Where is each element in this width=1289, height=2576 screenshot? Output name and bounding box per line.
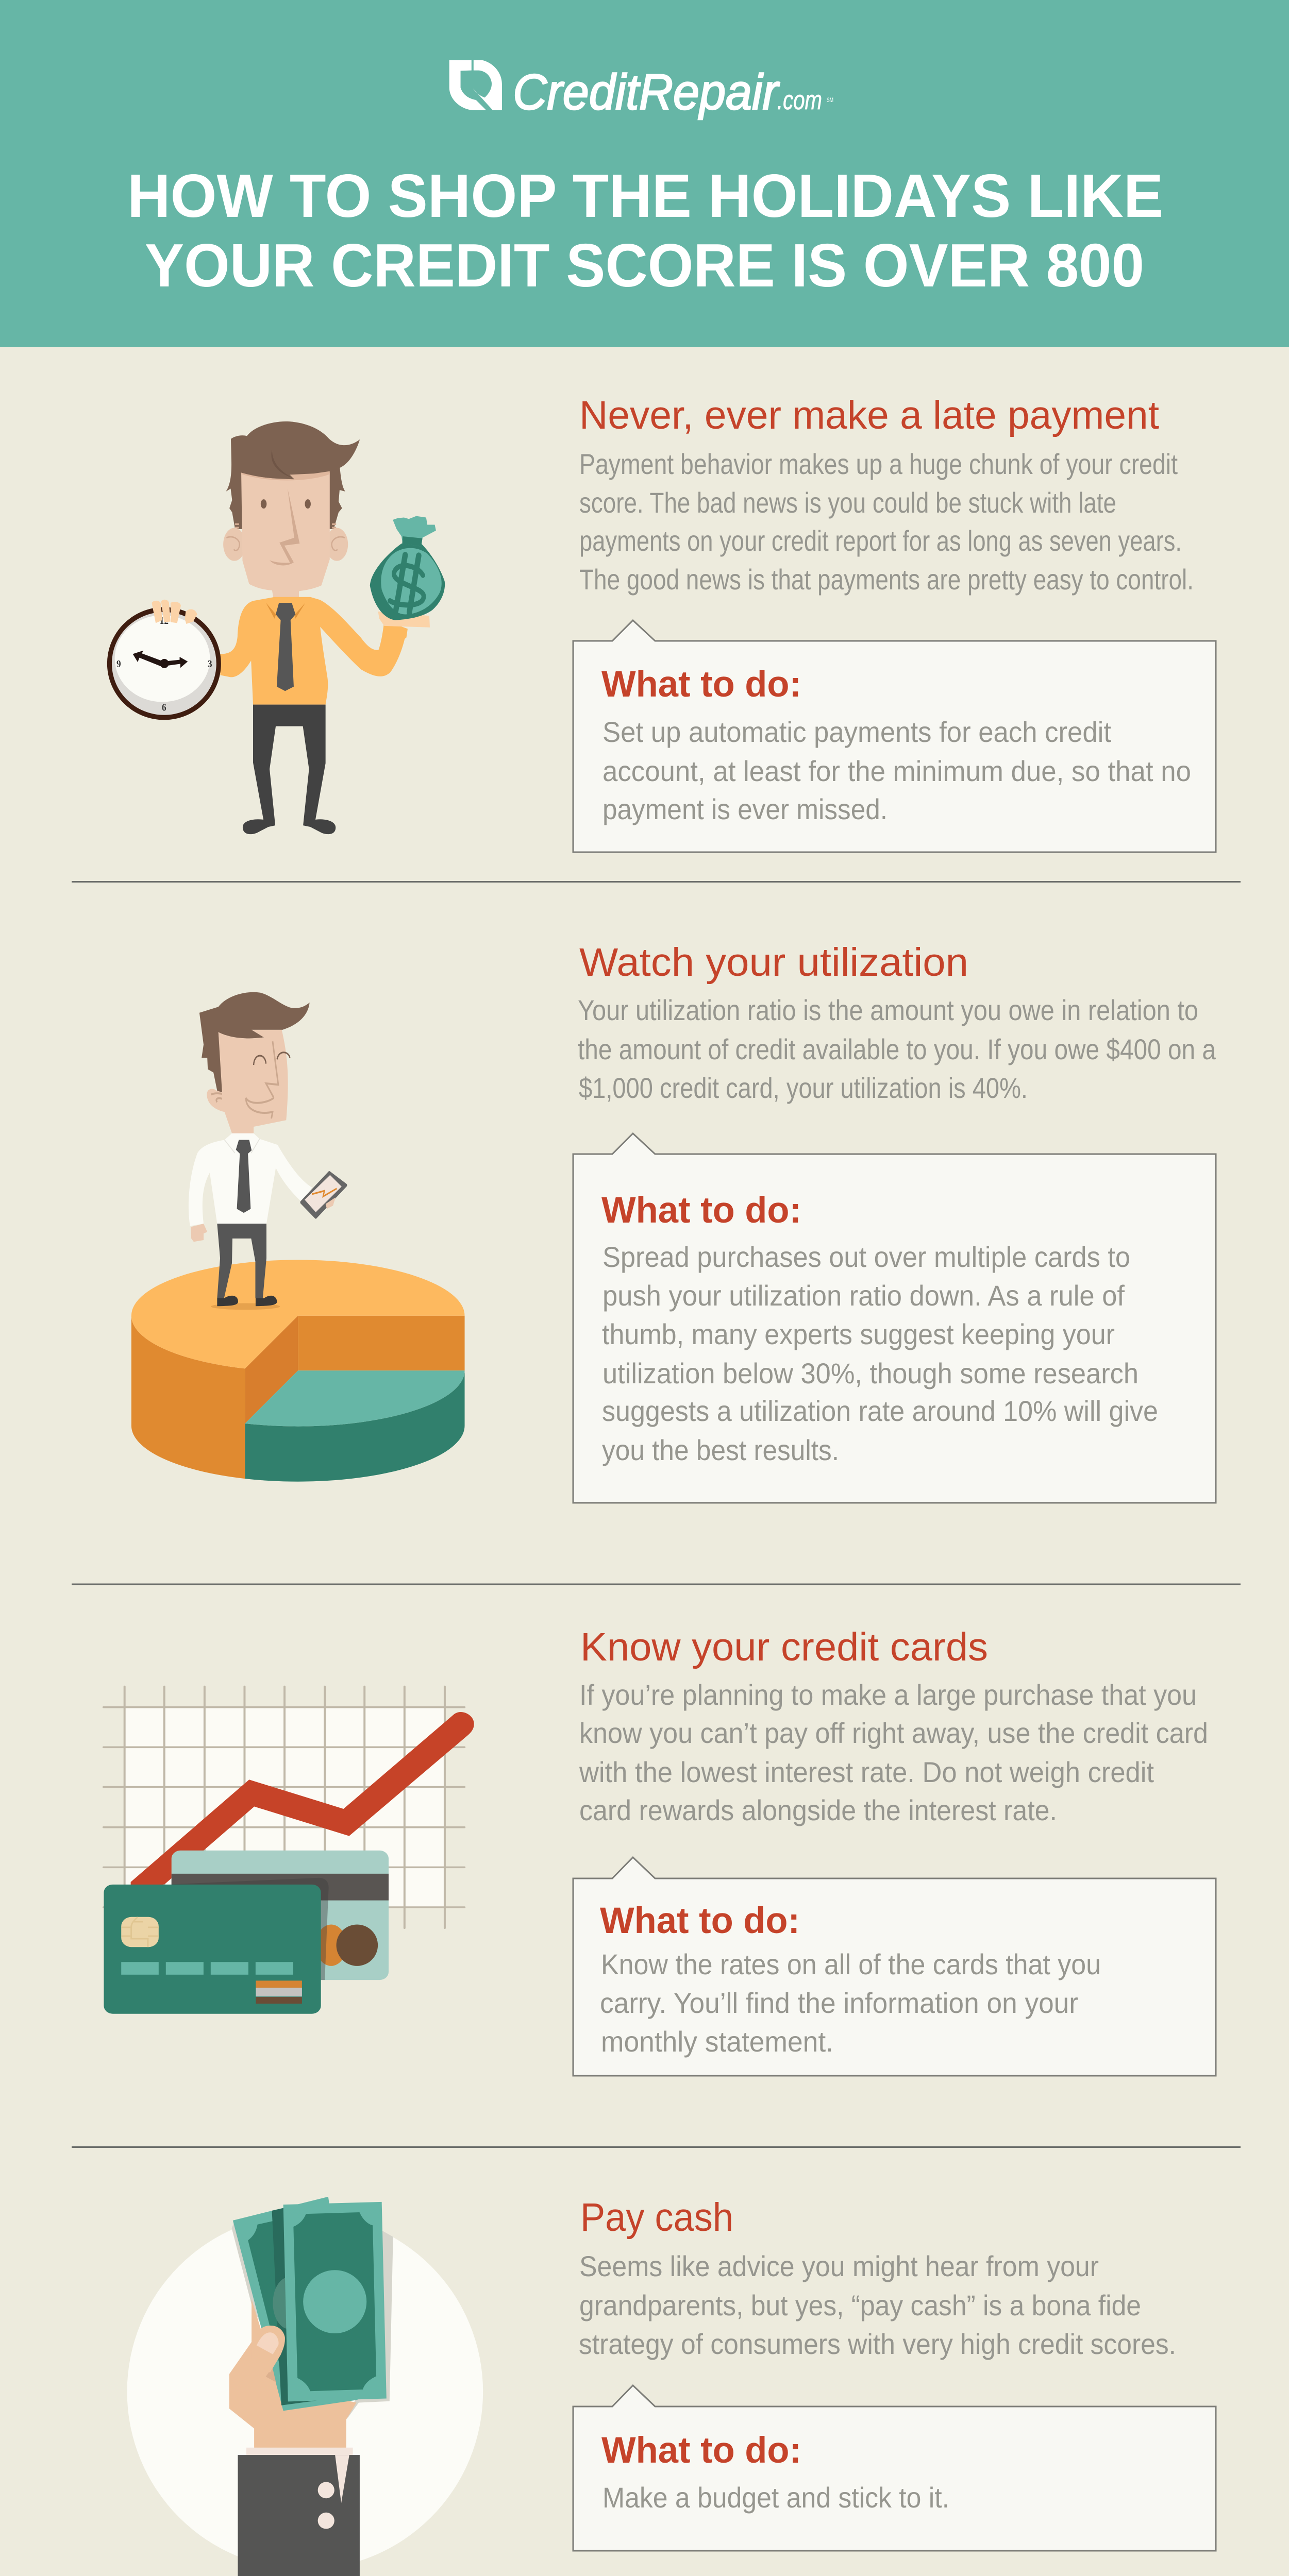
man: ear folds xyxy=(226,537,345,551)
body text: If you’re planning to make a large purchase that you xyxy=(579,1679,1197,1711)
callout: what to do xyxy=(573,1857,1216,2076)
callout: what to do xyxy=(573,620,1216,852)
callout: what to do xyxy=(573,2385,1216,2551)
heading: Never, ever make a late payment xyxy=(579,393,1159,437)
logo wordmark: CreditRepair xyxy=(513,64,780,120)
illustration: rising chart and credit cards xyxy=(104,1686,474,2014)
callout text: push your utilization ratio down. As a rule of xyxy=(602,1279,1125,1312)
illustration: man holding clock and money bag xyxy=(107,421,445,834)
icon: middle bill xyxy=(272,2207,322,2405)
body text: strategy of consumers with very high credit scores. xyxy=(579,2328,1176,2360)
body text xyxy=(578,994,1216,1104)
shirt cuff xyxy=(246,2448,353,2455)
callout heading: What to do: xyxy=(600,1901,800,1941)
illustration: man standing on pie chart xyxy=(131,992,465,1482)
body text: Seems like advice you might hear from your xyxy=(579,2250,1099,2282)
body text: with the lowest interest rate. Do not weigh credit xyxy=(579,1756,1154,1788)
title: YOUR CREDIT SCORE IS OVER 800 xyxy=(145,231,1144,300)
heading: Know your credit cards xyxy=(580,1625,988,1669)
title xyxy=(127,162,1163,300)
callout text: suggests a utilization rate around 10% will give xyxy=(602,1395,1158,1427)
logo service mark: SM xyxy=(827,96,833,104)
hand xyxy=(229,2299,356,2448)
body text xyxy=(579,448,1194,596)
callout text: monthly statement. xyxy=(601,2025,833,2058)
callout text xyxy=(600,1948,1101,2058)
heading: Pay cash xyxy=(580,2195,733,2240)
callout text xyxy=(602,716,1191,825)
icon: clock: 3 xyxy=(208,658,212,670)
body text xyxy=(579,1679,1208,1826)
panel: never make a late payment xyxy=(107,393,1216,852)
icon: clock: 6 xyxy=(162,702,166,714)
man: eyes xyxy=(261,499,311,509)
callout text: thumb, many experts suggest keeping your xyxy=(602,1318,1115,1350)
man: eyes xyxy=(254,1053,290,1065)
man: hairline shadow and curl xyxy=(241,471,330,480)
panel: pay cash xyxy=(127,2195,1216,2576)
callout text: Spread purchases out over multiple cards to xyxy=(602,1241,1130,1273)
background circle xyxy=(127,2214,483,2569)
panel: know your credit cards xyxy=(104,1625,1216,2076)
body text: Your utilization ratio is the amount you owe in relation to xyxy=(578,994,1198,1026)
man: tie xyxy=(276,603,295,691)
card badge xyxy=(256,1980,302,2004)
body text: know you can’t pay off right away, use the credit card xyxy=(579,1717,1208,1749)
icon: front credit card xyxy=(104,1885,321,2014)
icon: clock xyxy=(107,600,221,720)
card chip xyxy=(121,1917,159,1947)
chart line xyxy=(131,1712,474,1890)
callout text: Set up automatic payments for each credit xyxy=(602,716,1111,748)
icon: front bill xyxy=(283,2202,387,2401)
icon: phone xyxy=(302,1173,346,1217)
body text: Payment behavior makes up a huge chunk of your credit xyxy=(579,448,1178,480)
callout text: account, at least for the minimum due, so that no xyxy=(602,755,1191,787)
man: sideburn stripes xyxy=(235,523,336,529)
callout text: utilization below 30%, though some research xyxy=(602,1357,1139,1389)
body text: grandparents, but yes, “pay cash” is a bona fide xyxy=(579,2289,1141,2321)
callout text: you the best results. xyxy=(602,1434,839,1466)
man: shoes xyxy=(217,1296,277,1306)
man: face xyxy=(241,472,330,604)
man: ears xyxy=(223,528,348,561)
callout text: Make a budget and stick to it. xyxy=(602,2481,949,2514)
man: hair xyxy=(226,421,360,529)
header banner xyxy=(0,0,1289,347)
callout text: Know the rates on all of the cards that you xyxy=(601,1948,1101,1980)
illustration: hand holding cash xyxy=(127,2197,483,2576)
card number xyxy=(121,1962,293,1975)
man: left hand xyxy=(191,1224,207,1242)
callout heading: What to do: xyxy=(601,664,801,705)
man: trousers and shoes xyxy=(243,705,336,834)
icon: money bag xyxy=(370,516,445,628)
callout text xyxy=(602,1241,1158,1466)
pie chart xyxy=(131,1260,465,1482)
icon: logo mark xyxy=(449,60,502,110)
man: collar shading xyxy=(225,1139,260,1153)
chart grid xyxy=(104,1686,464,1928)
man: nose and smile xyxy=(270,488,299,565)
callout text: payment is ever missed. xyxy=(602,793,888,825)
man: collar xyxy=(266,603,305,619)
callout heading: What to do: xyxy=(601,2430,801,2471)
man: nose and smile xyxy=(211,1041,278,1118)
icon: clock: 12 xyxy=(160,615,169,626)
logo: CreditRepair.com xyxy=(449,60,833,120)
panel: watch your utilization xyxy=(131,940,1216,1503)
man: tie xyxy=(236,1140,252,1213)
callout text: carry. You’ll find the information on your xyxy=(600,1987,1078,2019)
man: trousers xyxy=(217,1224,266,1298)
man: face xyxy=(207,1030,288,1140)
body text xyxy=(579,2250,1176,2360)
heading: Watch your utilization xyxy=(579,940,968,985)
callout: what to do xyxy=(573,1133,1216,1503)
man: shirt xyxy=(189,1133,312,1226)
icon: back credit card xyxy=(172,1851,389,1980)
icon: rear bill xyxy=(233,2197,358,2411)
bill shadows xyxy=(231,2221,393,2419)
title: HOW TO SHOP THE HOLIDAYS LIKE xyxy=(127,162,1163,230)
man: shirt xyxy=(220,597,408,705)
icon: clock: 9 xyxy=(116,658,121,670)
body text: score. The bad news is you could be stuck with late xyxy=(579,486,1116,519)
jacket sleeve xyxy=(238,2455,360,2576)
body text: $1,000 credit card, your utilization is 40%. xyxy=(579,1072,1028,1104)
man: hair xyxy=(199,992,310,1094)
callout heading: What to do: xyxy=(601,1190,801,1231)
hand: thumb xyxy=(252,2326,285,2382)
body text: card rewards alongside the interest rate. xyxy=(579,1794,1057,1826)
man: shadow xyxy=(211,1303,280,1310)
logo suffix: .com xyxy=(777,86,822,115)
